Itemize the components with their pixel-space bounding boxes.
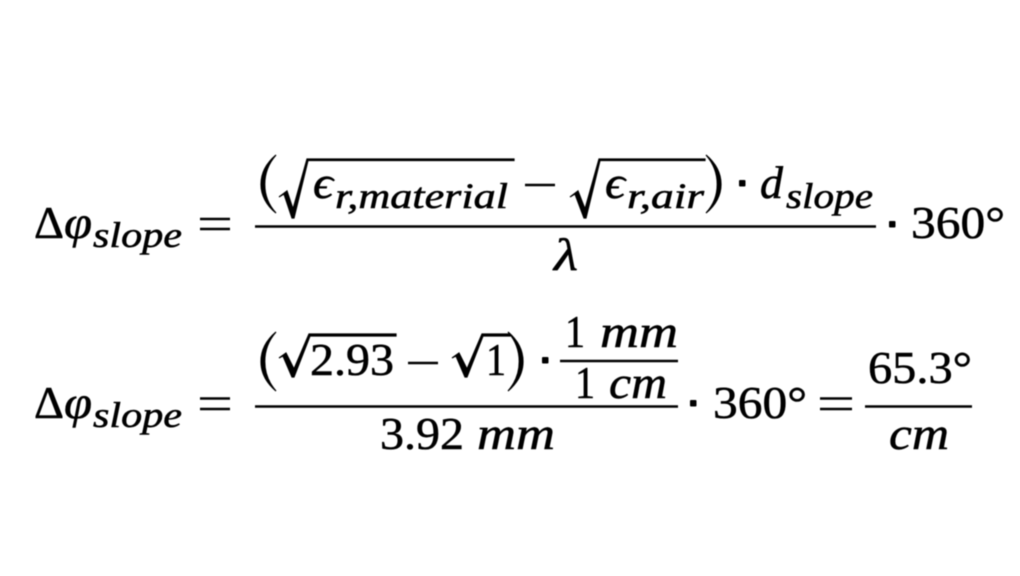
nested fraction: 1 mm over 1 cm: mm <box>600 306 678 357</box>
denominator: lambda: λ <box>552 229 578 280</box>
denominator: 3.92 mm <box>380 408 555 459</box>
nested fraction: 1 mm over 1 cm <box>560 306 678 408</box>
left side: delta phi slope <box>34 377 182 435</box>
result fraction: 65.3 degrees per cm: 65.3° <box>868 342 972 393</box>
left side: delta phi slope: Δ <box>34 197 64 248</box>
left side: delta phi slope: slope <box>93 395 182 435</box>
numerator: 2.93 <box>310 334 394 385</box>
fraction bar <box>255 225 876 228</box>
numerator: r,material <box>335 176 508 216</box>
equals sign <box>200 219 230 229</box>
numerator <box>261 155 873 218</box>
denominator: 3.92 mm: mm <box>477 408 555 459</box>
equation: general phase shift formula <box>34 155 1005 280</box>
multiply by 360 degrees: 360° <box>911 197 1005 248</box>
nested fraction: 1 mm over 1 cm: cm <box>609 357 667 408</box>
equation: numeric substitution <box>34 306 972 459</box>
equals sign <box>200 398 230 409</box>
numerator: ϵ <box>605 157 628 208</box>
left side: delta phi slope: φ <box>64 197 92 248</box>
left side: delta phi slope: slope <box>93 215 182 255</box>
result fraction: 65.3 degrees per cm: cm <box>889 408 949 459</box>
result fraction: 65.3 degrees per cm <box>865 342 972 459</box>
fraction bar <box>255 405 678 408</box>
nested fraction: 1 mm over 1 cm: 1 <box>565 306 585 357</box>
equals sign <box>820 398 852 409</box>
left side: delta phi slope <box>34 197 182 255</box>
nested fraction: 1 mm over 1 cm: 1 <box>575 357 595 408</box>
numerator: ϵ <box>313 157 336 208</box>
denominator: 3.92 mm: 3.92 <box>380 408 464 459</box>
numerator <box>261 306 678 408</box>
numerator: d <box>760 157 784 208</box>
multiply by 360 degrees: 360° <box>713 377 807 428</box>
left side: delta phi slope: φ <box>64 377 92 428</box>
numerator: slope <box>786 176 873 216</box>
numerator: r,air <box>627 176 705 216</box>
left side: delta phi slope: Δ <box>34 377 64 428</box>
numerator: 1 <box>486 334 506 385</box>
